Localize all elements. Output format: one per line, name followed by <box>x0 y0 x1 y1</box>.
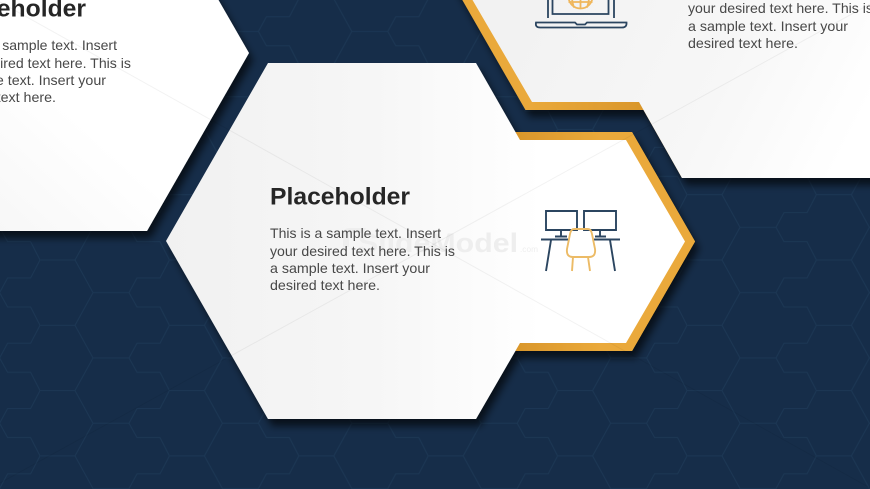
centre hexagon with gold arrow outline <box>166 63 695 419</box>
left body text <box>0 37 131 105</box>
centre body text: desired text here. <box>270 277 380 293</box>
panel: centre hexagon <box>166 63 695 419</box>
centre body text <box>270 225 455 293</box>
panel: upper right hexagon <box>452 0 870 178</box>
watermark: SlideModel <box>358 228 518 258</box>
panel: left hexagon <box>0 0 249 231</box>
icon: laptop with globe <box>536 0 627 28</box>
upper right body text: a sample text. Insert your <box>688 18 848 34</box>
upper right body text: your desired text here. This is <box>688 0 870 16</box>
upper right body text <box>688 0 870 51</box>
centre body text: This is a sample text. Insert <box>270 225 441 241</box>
left hexagon shape <box>0 0 249 231</box>
centre body text: a sample text. Insert your <box>270 260 430 276</box>
watermark: .com <box>520 245 538 254</box>
centre body text: your desired text here. This is <box>270 243 455 259</box>
centre heading: Placeholder <box>270 184 410 210</box>
upper right body text: desired text here. <box>688 35 798 51</box>
icon: two desks with monitors and chair <box>541 211 620 271</box>
upper right hexagon shape with gold edge <box>452 0 870 178</box>
